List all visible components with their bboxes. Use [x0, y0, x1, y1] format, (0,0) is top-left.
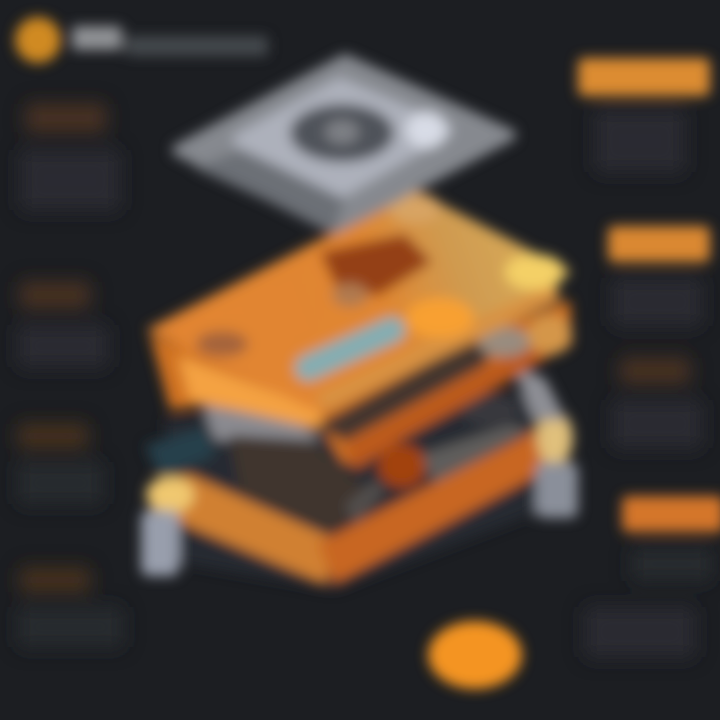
gray highlight	[200, 400, 320, 440]
bottom layer frame	[165, 390, 570, 590]
chip gray edge	[345, 480, 385, 525]
right label 2	[608, 226, 710, 326]
left item 1	[20, 104, 120, 210]
silver post left	[141, 510, 179, 576]
chip highlight	[406, 112, 446, 148]
middle layer front edge	[178, 356, 325, 430]
right label 4	[622, 496, 720, 581]
dark chip	[230, 435, 372, 530]
teal pill	[308, 330, 392, 368]
silver chip	[178, 60, 510, 232]
left item 3	[18, 424, 103, 504]
teal shadow edge	[145, 428, 215, 478]
bottom layer	[141, 365, 578, 590]
bottom layer left arm	[150, 475, 338, 584]
chip center	[290, 104, 394, 162]
right column labels	[578, 58, 720, 657]
icon: header badge	[15, 17, 61, 63]
chip lower shade	[195, 150, 345, 232]
highlight: left corner	[146, 477, 194, 513]
board surface	[146, 190, 572, 410]
top orange board	[146, 190, 572, 412]
bottom layer right arm	[318, 426, 552, 584]
board circuit detail	[320, 234, 432, 296]
middle orange edge	[345, 325, 568, 470]
middle layer	[150, 300, 572, 488]
right label 5	[585, 607, 695, 657]
heading	[72, 26, 122, 50]
left column labels	[18, 104, 123, 647]
header	[15, 17, 268, 63]
silver right rail	[512, 365, 566, 420]
bottom orange badge	[428, 621, 522, 689]
board underside fill	[150, 300, 572, 465]
subheading	[126, 36, 268, 56]
chip base	[178, 60, 510, 228]
gray tip	[479, 327, 531, 357]
silver post right top	[537, 410, 573, 466]
gray rail	[420, 425, 530, 485]
bottom-right dark cell	[462, 394, 518, 426]
left item 2	[18, 282, 108, 367]
rust joint	[378, 444, 426, 488]
chip inner plate	[240, 85, 445, 190]
left item 4	[18, 568, 123, 647]
middle dark slit	[316, 340, 494, 442]
board right edge	[315, 282, 560, 412]
chip center core	[325, 120, 359, 144]
right label 3	[612, 358, 702, 448]
silver post right	[536, 462, 578, 518]
right label 1	[578, 58, 710, 172]
orange tip	[528, 315, 572, 355]
